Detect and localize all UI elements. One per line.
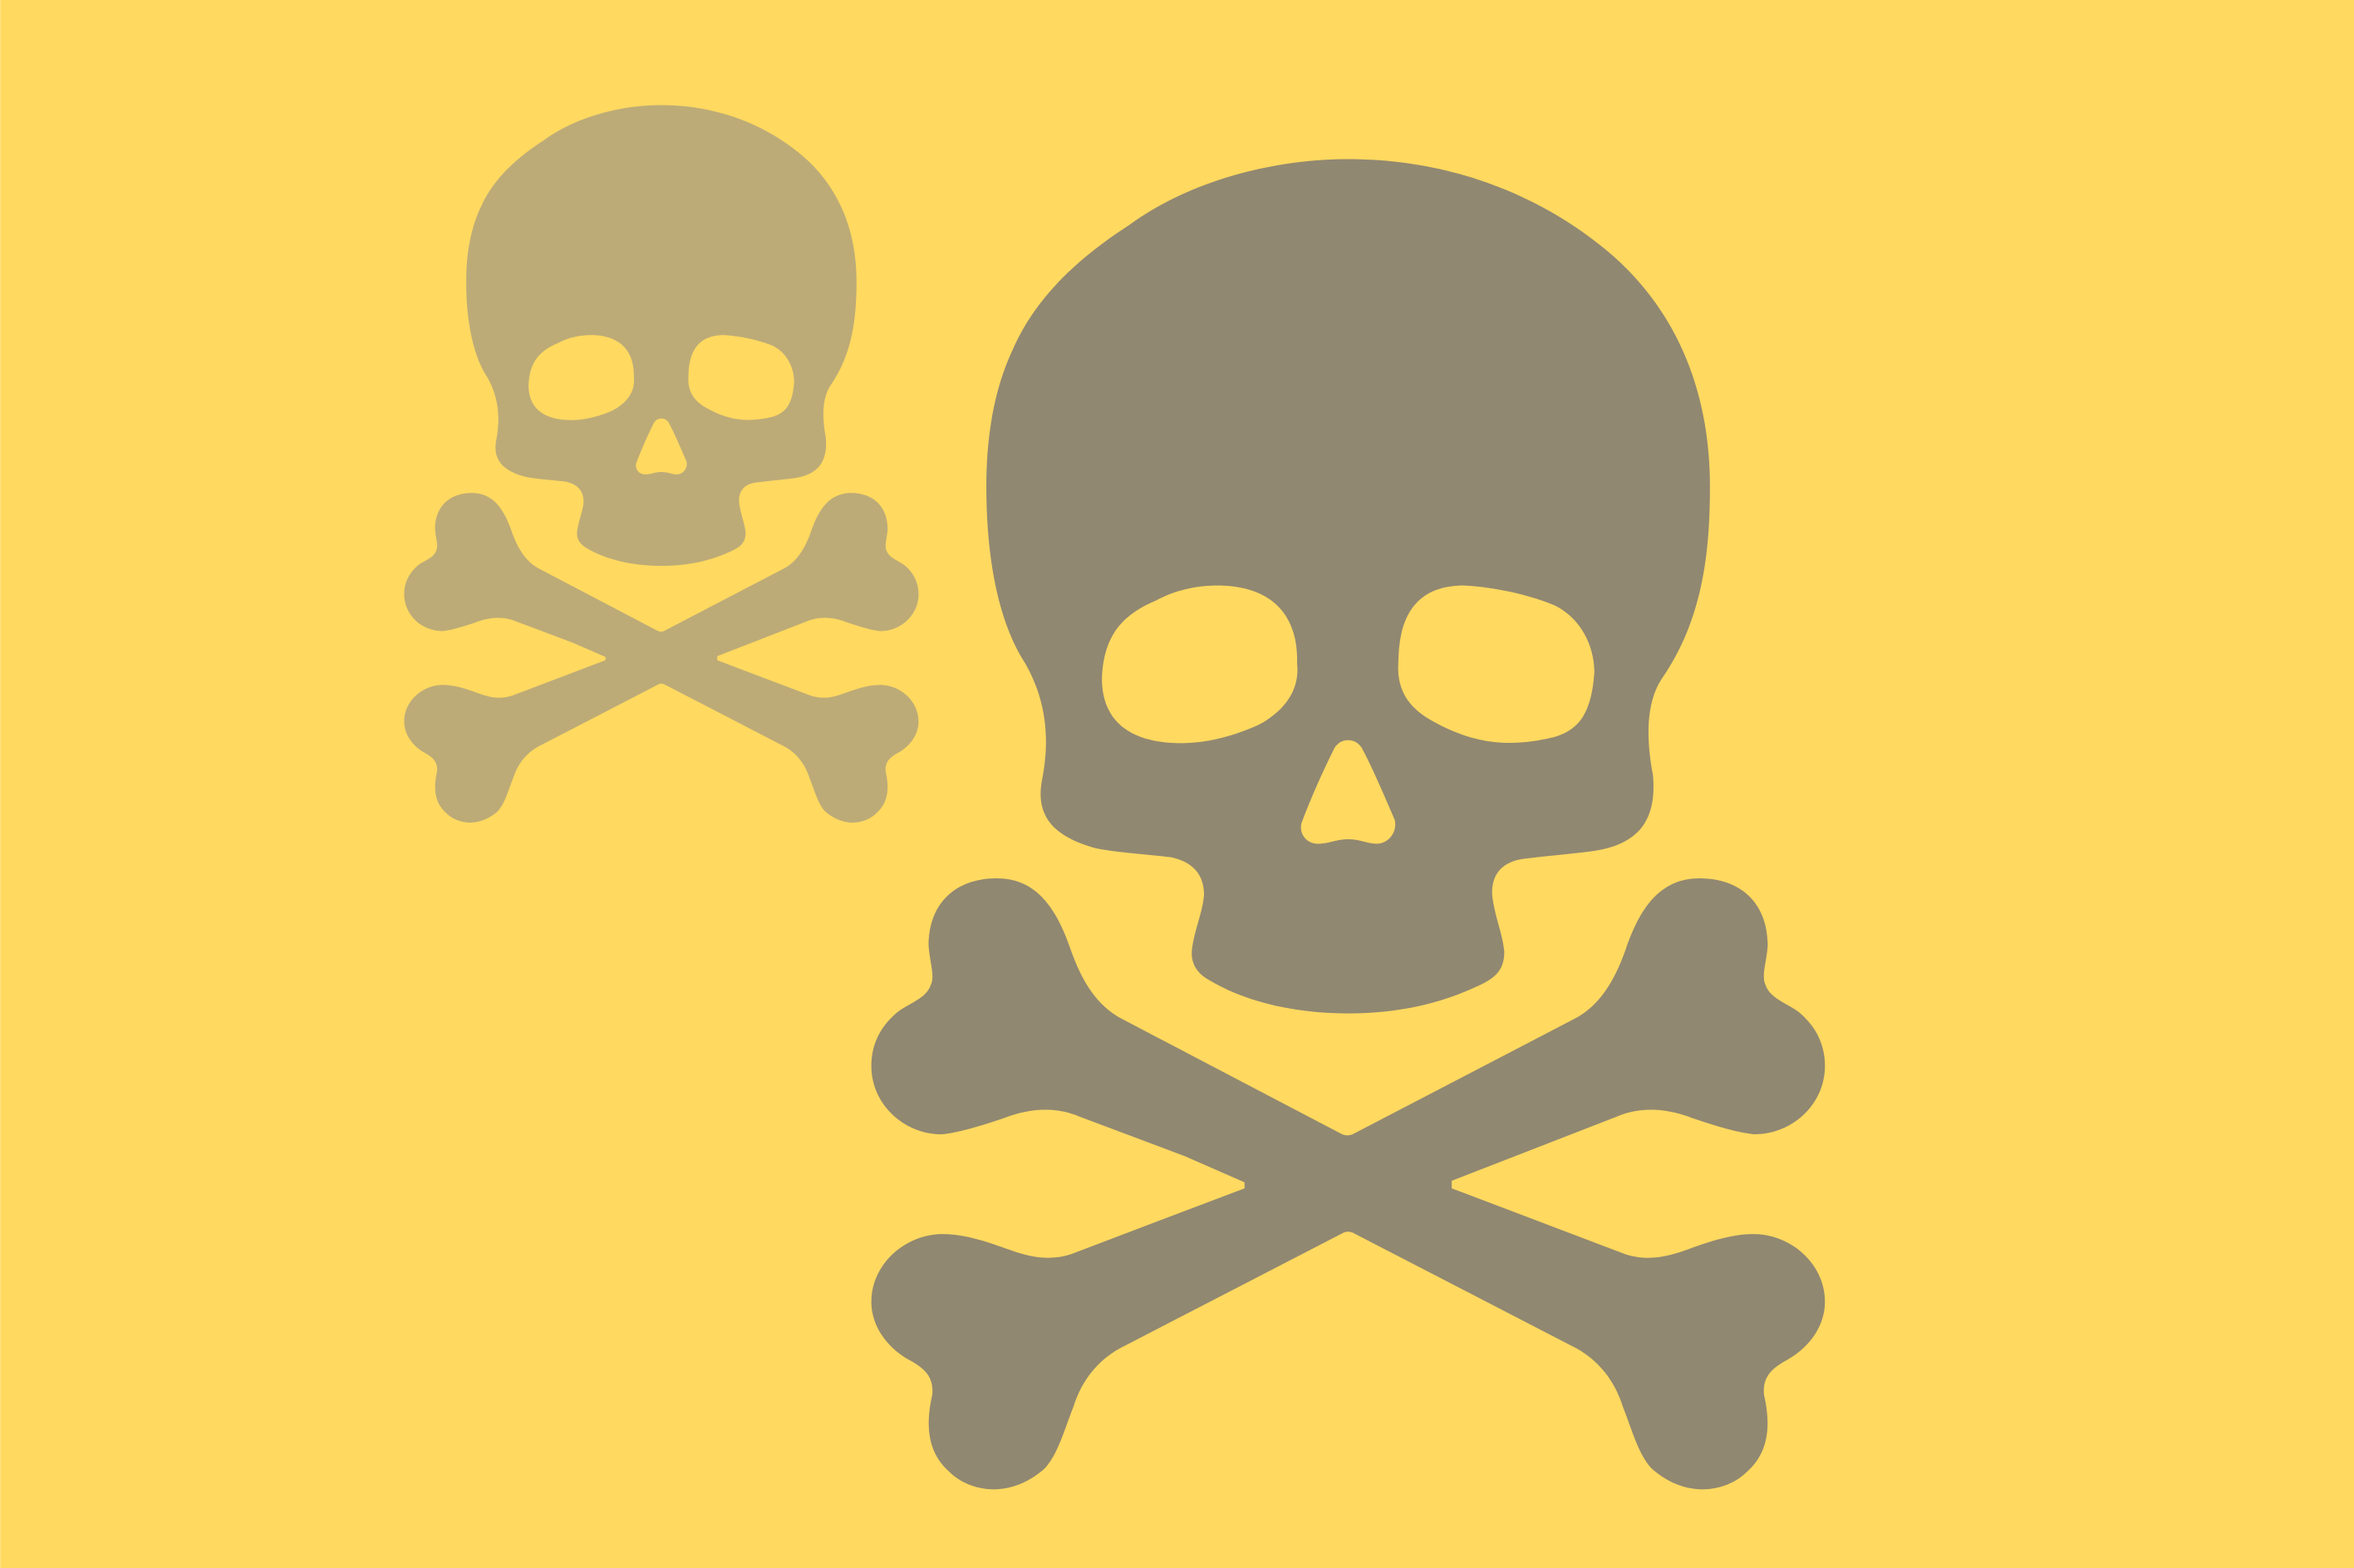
large skull and crossbones bbox=[872, 160, 1825, 1489]
small skull and crossbones bbox=[404, 105, 918, 823]
large crossbones bbox=[872, 878, 1825, 1489]
small skull bbox=[466, 105, 857, 566]
small crossbones bbox=[404, 493, 918, 823]
large skull bbox=[986, 160, 1710, 1014]
